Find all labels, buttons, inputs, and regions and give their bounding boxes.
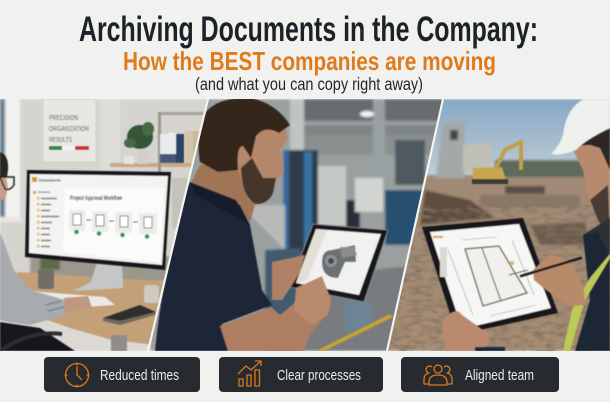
poster: ORGANIZATION [49,124,89,133]
chip: reduced times: Reduced times [100,367,179,384]
desk [0,272,172,345]
tablet with floor plan [422,218,558,335]
office background [0,99,210,351]
monitor stand [73,262,123,291]
chip: clear processes: Clear processes [277,367,361,384]
gravel texture [388,205,610,351]
icon: team [424,365,452,385]
tagline: (and what you can copy right away) [195,74,423,94]
mugs, keyboard and notebook [28,269,159,325]
chip: clear processes [219,357,383,392]
floor marking [316,314,393,351]
panel: factory photo [150,98,450,351]
poster [43,99,96,162]
man in polo [155,98,322,351]
tablet with 3D part [272,224,388,325]
shelf with binders and plant [110,112,210,228]
chip: reduced times [44,357,200,392]
panel: construction site photo [385,99,610,351]
factory background [150,99,450,351]
monitor with workflow [25,170,171,270]
engineer with helmet [442,99,610,351]
sky and site background [385,99,610,351]
woman at desk [0,152,92,351]
monitor with workflow: Documents [39,178,62,182]
monitor with workflow: Project Approval Workflow [70,196,122,202]
desk legs [111,335,127,351]
chip: aligned team [401,357,559,392]
excavator [472,142,521,184]
subtitle: How the BEST companies are moving [123,46,496,76]
poster: RESULTS [49,135,72,144]
chip: aligned team: Aligned team [465,367,534,384]
panel divider [148,99,443,351]
poster: PRECISION [49,113,78,122]
panel: office photo [0,99,210,351]
icon: clock [65,363,89,387]
icon: growth chart [238,361,261,386]
monitor with workflow: Archivio [38,190,50,194]
